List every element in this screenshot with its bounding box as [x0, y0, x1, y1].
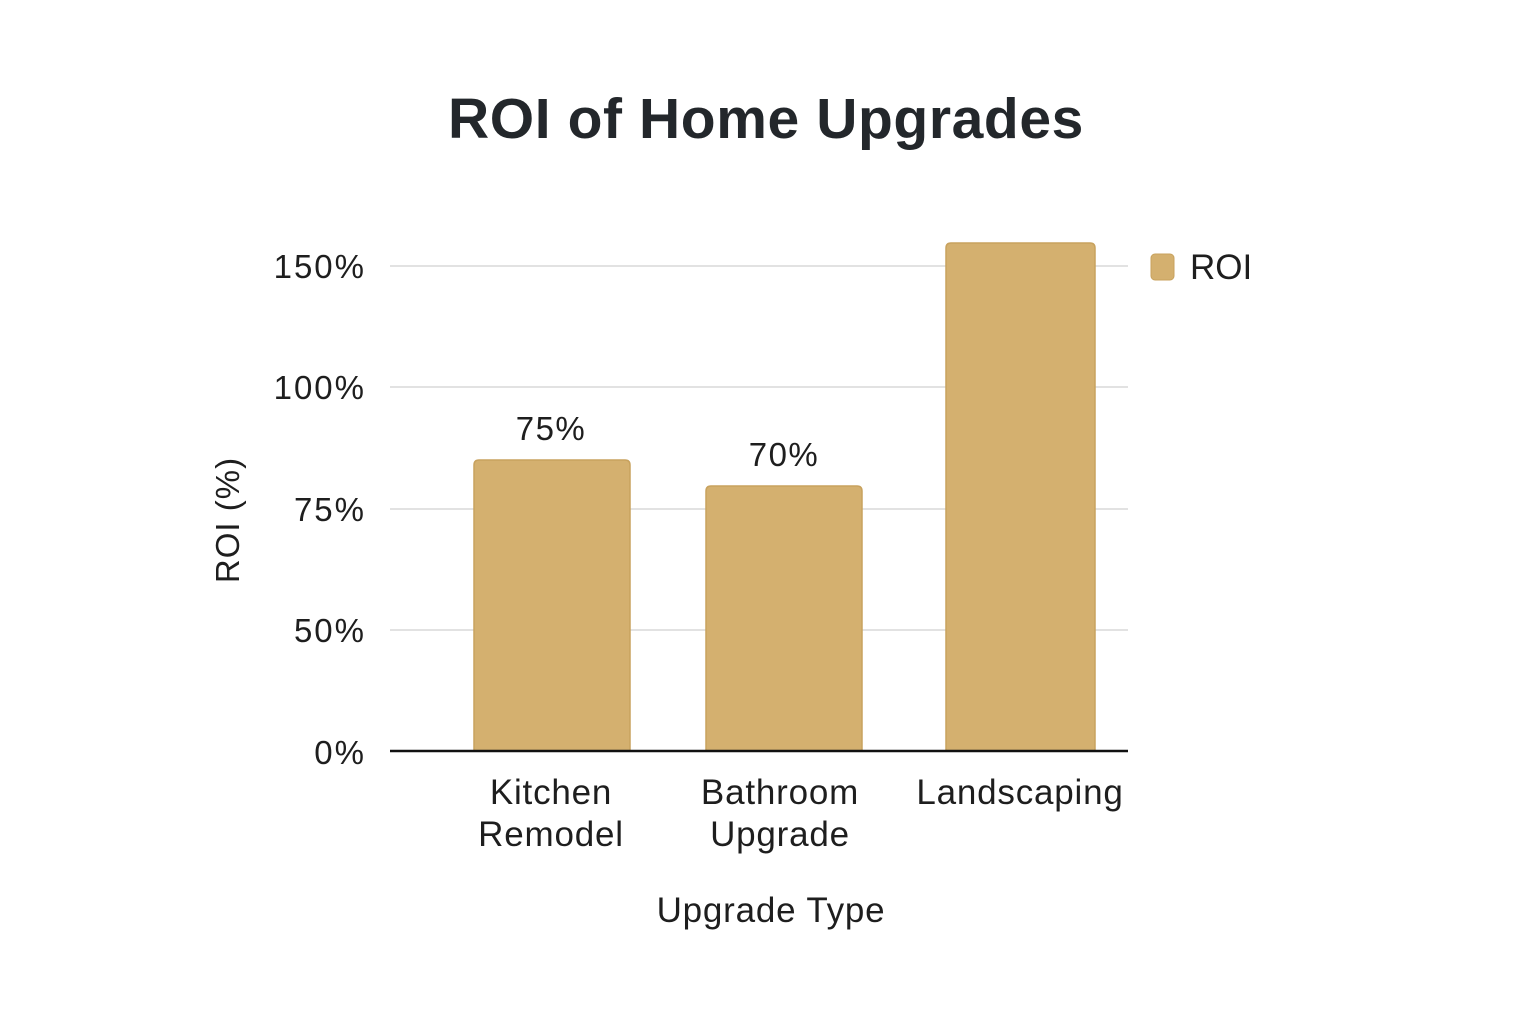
x category labels: Upgrade [710, 815, 850, 854]
x axis title: Upgrade Type [657, 891, 885, 930]
y axis tick labels: 100% [274, 369, 366, 406]
legend: ROI [1190, 248, 1252, 287]
x category labels: Remodel [478, 815, 624, 854]
value labels: 70% [749, 436, 819, 473]
y axis tick labels [274, 248, 366, 771]
y axis title: ROI (%) [209, 457, 246, 583]
bar: kitchen remodel [474, 460, 630, 751]
x category labels: Kitchen [490, 773, 612, 812]
value labels [516, 410, 819, 473]
y axis tick labels: 0% [314, 734, 366, 771]
title: ROI of Home Upgrades [448, 87, 1084, 151]
value labels: 75% [516, 410, 586, 447]
y axis tick labels: 50% [294, 612, 366, 649]
x category labels [478, 773, 1124, 854]
y axis tick labels: 75% [294, 491, 366, 528]
legend [1151, 248, 1252, 287]
bar: bathroom upgrade [706, 486, 862, 751]
x category labels: Bathroom [701, 773, 859, 812]
bar: landscaping [946, 243, 1095, 751]
y axis tick labels: 150% [274, 248, 366, 285]
x category labels: Landscaping [916, 773, 1124, 812]
x axis line [390, 750, 1128, 752]
bars [474, 243, 1095, 751]
